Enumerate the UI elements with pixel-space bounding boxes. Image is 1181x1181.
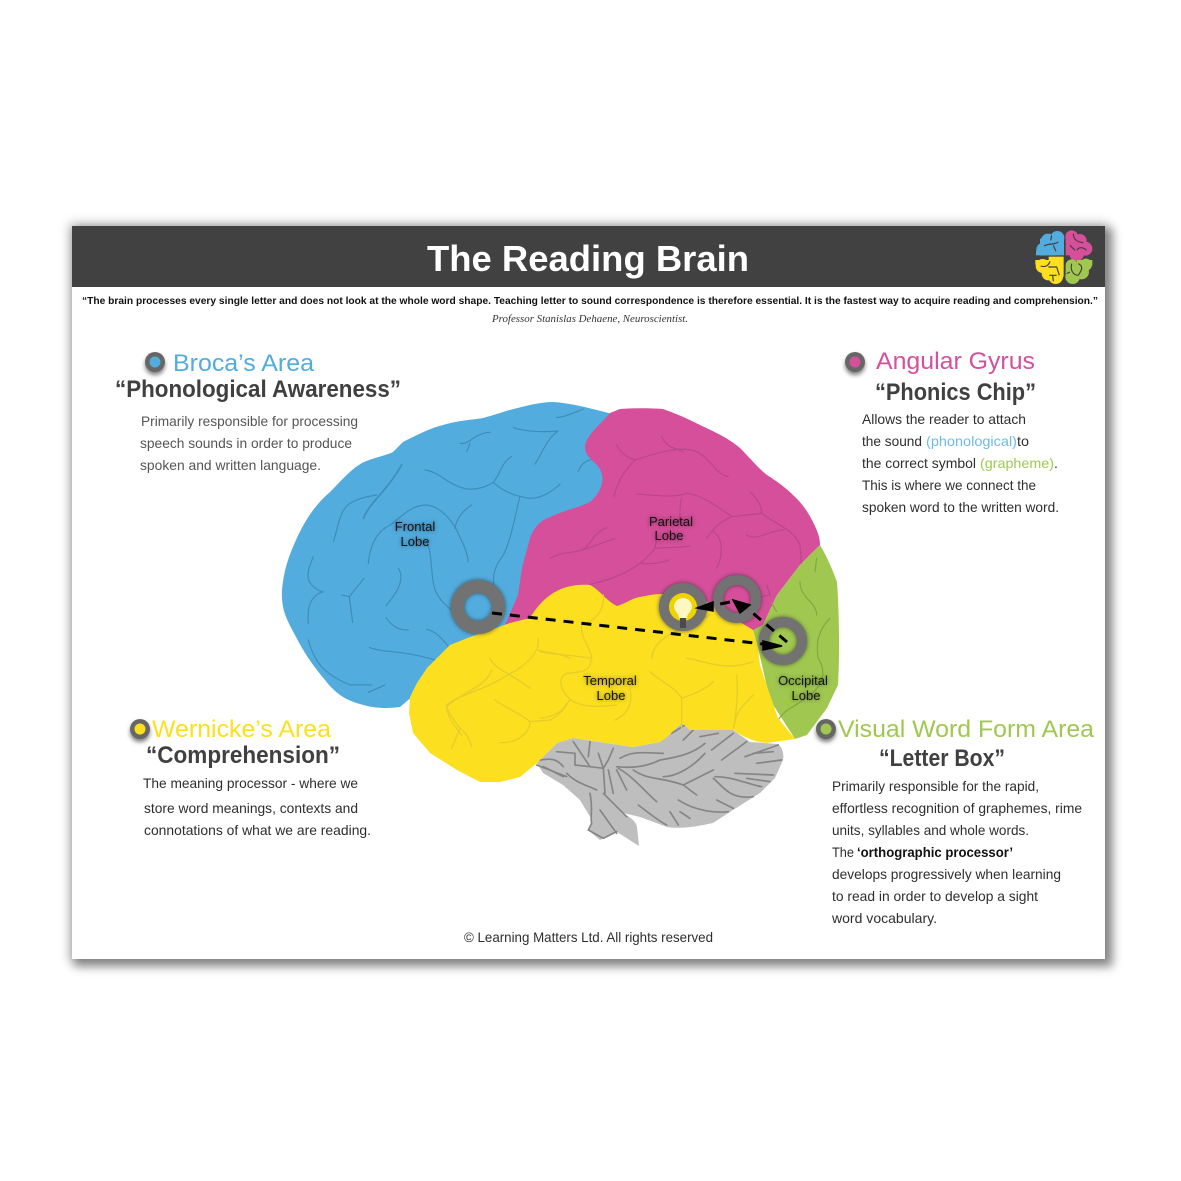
body text: store word meanings, contexts and bbox=[144, 800, 358, 816]
panel: visual word form area bbox=[816, 716, 1095, 926]
label: parietal lobe: Parietal bbox=[649, 514, 693, 529]
ring marker: angular gyrus bbox=[718, 580, 756, 618]
label: frontal lobe: Lobe bbox=[401, 534, 429, 549]
body text: ‘orthographic processor’ bbox=[857, 844, 1013, 860]
body text: Primarily responsible for processing bbox=[141, 413, 358, 429]
label: temporal lobe: Temporal bbox=[583, 673, 637, 688]
subheading: “Comprehension” bbox=[146, 742, 340, 769]
label: occipital lobe: Occipital bbox=[778, 673, 828, 688]
quote attribution: Professor Stanislas Dehaene, Neuroscientist. bbox=[491, 313, 688, 325]
ring marker: Broca's area bbox=[458, 586, 498, 628]
occipital lobe bbox=[753, 545, 839, 739]
icon: yellow dot bbox=[130, 719, 150, 739]
body text: Allows the reader to attach bbox=[862, 411, 1026, 427]
body text: units, syllables and whole words. bbox=[832, 822, 1029, 838]
body text bbox=[143, 775, 371, 838]
panel: Broca's area bbox=[115, 350, 401, 473]
parietal lobe bbox=[505, 408, 820, 650]
header bar bbox=[72, 226, 1105, 287]
body text bbox=[862, 411, 1059, 515]
icon: light bulb bbox=[674, 598, 692, 628]
body text bbox=[831, 778, 1082, 926]
arrow: visual word form area to angular gyrus bbox=[733, 600, 787, 642]
body text: word vocabulary. bbox=[831, 910, 937, 926]
poster panel background bbox=[72, 226, 1105, 959]
label: temporal lobe: Lobe bbox=[597, 688, 625, 703]
icon: green dot bbox=[816, 719, 836, 739]
icon: four colour brain logo bbox=[1035, 230, 1092, 284]
body text: the sound bbox=[862, 433, 922, 449]
ring marker: light bulb Wernicke's area bbox=[664, 588, 702, 628]
cerebellum bbox=[537, 723, 783, 846]
subheading: “Phonological Awareness” bbox=[115, 376, 401, 403]
body text bbox=[140, 413, 358, 473]
heading: Broca’s Area bbox=[173, 350, 315, 377]
panel: Wernicke's area bbox=[130, 716, 371, 838]
body text: effortless recognition of graphemes, rime bbox=[832, 800, 1082, 816]
heading: Wernicke’s Area bbox=[152, 716, 332, 743]
subheading: “Phonics Chip” bbox=[875, 379, 1036, 406]
body text: speech sounds in order to produce bbox=[140, 435, 352, 451]
body text: develops progressively when learning bbox=[832, 866, 1061, 882]
body text: spoken and written language. bbox=[140, 457, 321, 473]
body text: Primarily responsible for the rapid, bbox=[832, 778, 1039, 794]
body text: to bbox=[1017, 433, 1029, 449]
footer copyright: © Learning Matters Ltd. All rights reserved bbox=[464, 929, 713, 945]
body text: The bbox=[832, 844, 854, 860]
subheading: “Letter Box” bbox=[879, 745, 1005, 772]
temporal lobe bbox=[409, 585, 795, 782]
body text: (grapheme) bbox=[980, 455, 1054, 471]
body text: . bbox=[1054, 455, 1058, 471]
body text: spoken word to the written word. bbox=[862, 499, 1059, 515]
panel: angular gyrus bbox=[845, 348, 1059, 515]
label: frontal lobe: Frontal bbox=[395, 519, 435, 534]
title: The Reading Brain bbox=[427, 238, 749, 279]
label: parietal lobe: Lobe bbox=[655, 528, 683, 543]
body text: This is where we connect the bbox=[862, 477, 1036, 493]
body text: to read in order to develop a sight bbox=[832, 888, 1038, 904]
ring marker: visual word form area bbox=[764, 622, 802, 660]
label: occipital lobe: Lobe bbox=[792, 688, 820, 703]
arrow: Broca to visual word form area bbox=[492, 613, 782, 650]
arrow: angular gyrus to light bulb bbox=[697, 602, 730, 611]
brain diagram bbox=[282, 402, 839, 846]
icon: blue dot bbox=[145, 352, 165, 372]
quote: “The brain processes every single letter and does not look at the whole word shape. Teaching letter to sound correspondence is therefore essential. It is the fastest way to acquire reading and comprehension.” bbox=[82, 296, 1098, 307]
body text: the correct symbol bbox=[862, 455, 976, 471]
heading: Angular Gyrus bbox=[876, 348, 1035, 375]
body text: connotations of what we are reading. bbox=[144, 822, 371, 838]
icon: pink dot bbox=[845, 352, 865, 372]
body text: (phonological) bbox=[926, 433, 1017, 449]
frontal lobe bbox=[282, 402, 612, 708]
body text: The meaning processor - where we bbox=[143, 775, 358, 791]
heading: Visual Word Form Area bbox=[838, 716, 1095, 743]
